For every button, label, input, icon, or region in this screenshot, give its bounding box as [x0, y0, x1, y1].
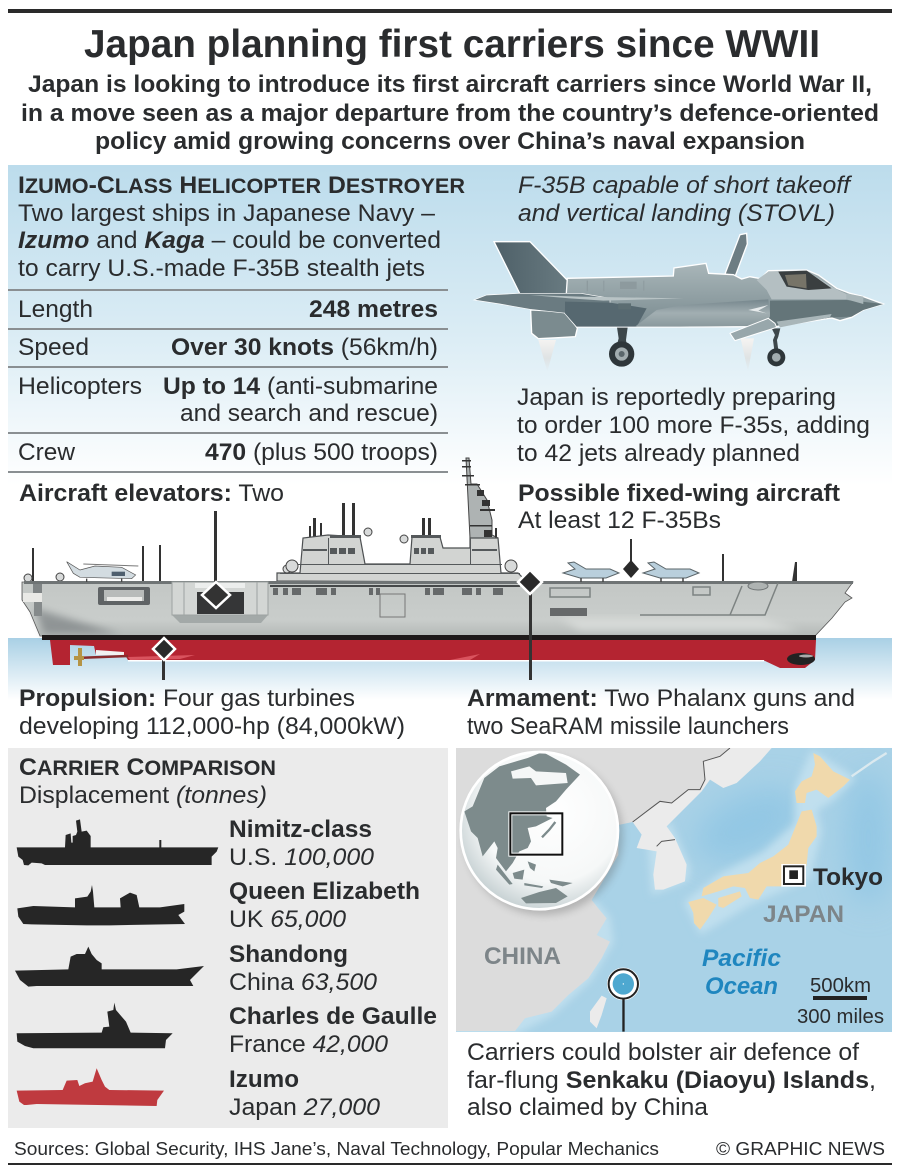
spec: length: [18, 296, 438, 323]
F-35 order text: to 42 jets already planned: [517, 440, 800, 467]
fuselage pod: [777, 314, 832, 327]
upper fuselage highlight: [757, 271, 847, 299]
subtitle: policy amid growing concerns over China’s naval expansion: [95, 128, 805, 155]
heading: CARRIER COMPARISON: [19, 754, 276, 781]
label: fixed-wing aircraft: At least 12 F-35Bs: [518, 507, 721, 534]
entry: Nimitz: [229, 816, 375, 871]
Senkaku text: far-flung Senkaku (Diaoyu) Islands ,: [467, 1067, 876, 1094]
entry: Shandong: Shandong: [229, 941, 348, 968]
Senkaku text: also claimed by China: [467, 1094, 709, 1121]
F-35B caption: [518, 172, 852, 227]
sources: Sources: Global Security, IHS Jane’s, Naval Technology, Popular Mechanics: [14, 1139, 659, 1159]
entry: Queen Elizabeth: Queen Elizabeth: [229, 878, 420, 905]
nose underside: [765, 300, 883, 326]
label: aircraft elevators: Aircraft elevators: Two: [19, 480, 284, 507]
silhouette: Queen Elizabeth: [17, 885, 185, 925]
rear lower fuselage: [565, 302, 647, 327]
entry: Izumo: Izumo: [229, 1066, 299, 1093]
rear elevator bay: [172, 582, 268, 623]
entry: Charles de Gaulle: [229, 1003, 437, 1058]
nose tip highlight: [847, 293, 863, 304]
hull boot stripe: [42, 635, 816, 640]
subtitle: Japan is looking to introduce its first aircraft carriers since World War II,: [28, 71, 872, 98]
globe land: Australia: [521, 888, 568, 903]
land: Russian Far East and Korea: [633, 748, 772, 890]
land: Japan: [688, 753, 887, 930]
engine nozzle: [531, 310, 577, 339]
globe land: Eurasia: [464, 752, 580, 871]
label: fixed-wing aircraft: Possible fixed-wing aircraft: [518, 480, 840, 507]
coastal shallows: [456, 755, 850, 1031]
sea band: [8, 638, 892, 700]
F-35 on deck, aft: [563, 562, 619, 582]
rudder: [50, 640, 70, 665]
red hull: [42, 640, 816, 668]
panel: carrier comparison: [8, 748, 448, 1128]
entry: Izumo: [229, 1066, 381, 1121]
intake: [635, 299, 771, 327]
label: fixed-wing aircraft: [518, 480, 840, 534]
label: propulsion: developing 112,000-hp (84,000kW): [19, 713, 405, 740]
silhouette: Charles de Gaulle: [17, 1003, 173, 1048]
canopy: [778, 271, 832, 290]
intro text: [18, 200, 441, 282]
spec: speed: Speed: [18, 334, 89, 361]
hatch: [618, 303, 631, 309]
F-35B caption: and vertical landing (STOVL): [518, 200, 835, 227]
bow light band: [560, 618, 800, 630]
spec: helicopters: Helicopters: [18, 373, 142, 400]
masts: [32, 503, 797, 582]
F-35 on deck, forward: [643, 562, 699, 582]
F-35 order text: Japan is reportedly preparing: [517, 384, 836, 411]
top rule: [8, 9, 892, 13]
label: armament: two SeaRAM missile launchers: [467, 713, 789, 740]
callout: armament marker: [518, 570, 542, 680]
propeller and shaft: [76, 656, 128, 658]
subtitle: in a move seen as a major departure from the country’s defence-oriented: [21, 100, 879, 127]
radar tower: [466, 458, 498, 538]
spec: helicopters: and search and rescue): [180, 400, 438, 427]
silhouette: Nimitz: [17, 819, 218, 865]
label: armament: Armament: Two Phalanx guns and: [467, 685, 855, 712]
tail fin: [494, 242, 581, 294]
tailplane: [474, 293, 610, 313]
map label: Japan: JAPAN: [763, 901, 844, 928]
spec: crew: 470 (plus 500 troops): [205, 439, 438, 466]
callout: fixed-wing marker: [623, 539, 639, 578]
spec: length: 248 metres: [309, 296, 438, 323]
map label: China: CHINA: [484, 943, 561, 970]
island superstructure: [277, 535, 527, 582]
globe shadow: [464, 756, 623, 915]
border lines: [633, 748, 730, 822]
unit label: Displacement (tonnes): [19, 782, 267, 809]
intro text: Izumo and Kaga – could be converted: [18, 227, 441, 254]
intro text: to carry U.S.-made F-35B stealth jets: [18, 255, 425, 282]
label: propulsion: Propulsion: Four gas turbines: [19, 685, 355, 712]
entry: Nimitz: Nimitz-class: [229, 816, 372, 843]
locator box: [508, 811, 547, 857]
stern transom patches: [23, 584, 42, 616]
F-35B caption: F-35B capable of short takeoff: [518, 172, 852, 199]
spec: speed: [18, 334, 438, 361]
lift fan door: [725, 233, 747, 276]
map scale: 300 miles: [797, 1006, 884, 1028]
illustration: Izumo ship: [22, 458, 853, 668]
map label: Pacific Ocean: Ocean: [705, 973, 778, 1000]
map label: Pacific Ocean: Pacific: [702, 945, 781, 972]
entry: Queen Elizabeth: [229, 878, 420, 933]
globe inset: [461, 752, 618, 909]
map scale: 500km: [810, 975, 871, 997]
entry: Charles de Gaulle: France 42,000: [229, 1031, 389, 1058]
stern shade: [34, 608, 120, 634]
spec: crew: Crew: [18, 439, 76, 466]
bow deck fitting: [748, 582, 768, 590]
illustration: F-35B jet: [474, 233, 883, 372]
panel: Izumo-class specs: [8, 172, 465, 473]
flight deck edge: [24, 581, 853, 584]
hull waterline highlights: [128, 654, 480, 660]
map: East Asia: [456, 748, 892, 1032]
deep sea shading: [684, 772, 892, 905]
entry: Shandong: China 63,500: [229, 969, 378, 996]
heading: Izumo-class helicopter destroyer: IZUMO-CLASS HELICOPTER DESTROYER: [18, 172, 465, 199]
fuselage markings: [587, 281, 644, 291]
map label: Pacific Ocean: [702, 945, 781, 1000]
island detail bands: [280, 535, 520, 574]
silhouette: Izumo: [17, 1068, 164, 1106]
Senkaku text: [467, 1039, 876, 1121]
silhouette: Shandong: [15, 947, 204, 987]
entry: Queen Elizabeth: UK 65,000: [229, 906, 347, 933]
forward bay details: [550, 583, 778, 615]
chevron mark: [748, 305, 768, 313]
land: China and Russia: [456, 748, 730, 1031]
fuselage: [565, 263, 883, 327]
highlight along tailplane: [530, 295, 683, 301]
hull windows: [273, 588, 587, 616]
title: Japan planning first carriers since WWII: [84, 23, 820, 66]
map label: Tokyo: Tokyo: [813, 864, 883, 891]
hull waterline: [128, 660, 764, 662]
callout: aircraft elevator marker: [202, 511, 230, 608]
F-35 order text: [517, 384, 870, 467]
globe land: islands: [496, 861, 573, 888]
map scale: [797, 975, 884, 1028]
credit: © GRAPHIC NEWS: [716, 1139, 885, 1159]
panel: sky background: [8, 165, 892, 485]
entry: Charles de Gaulle: Charles de Gaulle: [229, 1003, 437, 1030]
spec: length: Length: [18, 296, 93, 323]
stern boat recess: [98, 587, 150, 605]
radar tower detail: [462, 460, 497, 538]
intro text: Two largest ships in Japanese Navy –: [18, 200, 436, 227]
Senkaku text: Carriers could bolster air defence of: [467, 1039, 859, 1066]
hull hatch: [380, 594, 405, 617]
lift plumes: [538, 338, 754, 372]
table rules: [8, 289, 448, 473]
spec: helicopters: Up to 14 (anti-submarine: [163, 373, 438, 400]
entry: Shandong: [229, 941, 378, 996]
F-35 order text: to order 100 more F-35s, adding: [517, 412, 870, 439]
globe land: Siberia highlight: [511, 766, 568, 785]
label: armament: [467, 685, 855, 740]
bulbous bow: [787, 653, 815, 665]
land: Taiwan: [590, 996, 607, 1028]
label: propulsion: [19, 685, 405, 740]
entry: Nimitz: U.S. 100,000: [229, 844, 375, 871]
helicopter: [67, 562, 138, 582]
spec: crew: [18, 439, 438, 466]
spec: helicopters: [18, 373, 438, 427]
nose landing gear: [767, 328, 785, 366]
weapons pod: [730, 318, 777, 341]
subtitle: [21, 71, 879, 155]
entry: Izumo: Japan 27,000: [229, 1094, 381, 1121]
spec: speed: Over 30 knots (56km/h): [171, 334, 438, 361]
bottom rule: [8, 1163, 892, 1165]
Tokyo marker: [781, 864, 806, 887]
Senkaku marker: [607, 968, 640, 1032]
callout: propulsion marker: [153, 638, 175, 680]
radomes: [24, 528, 517, 582]
main landing gear: [609, 325, 634, 367]
globe land: Japan: [542, 822, 555, 837]
hull: [22, 582, 853, 636]
hull notch: [96, 650, 124, 655]
